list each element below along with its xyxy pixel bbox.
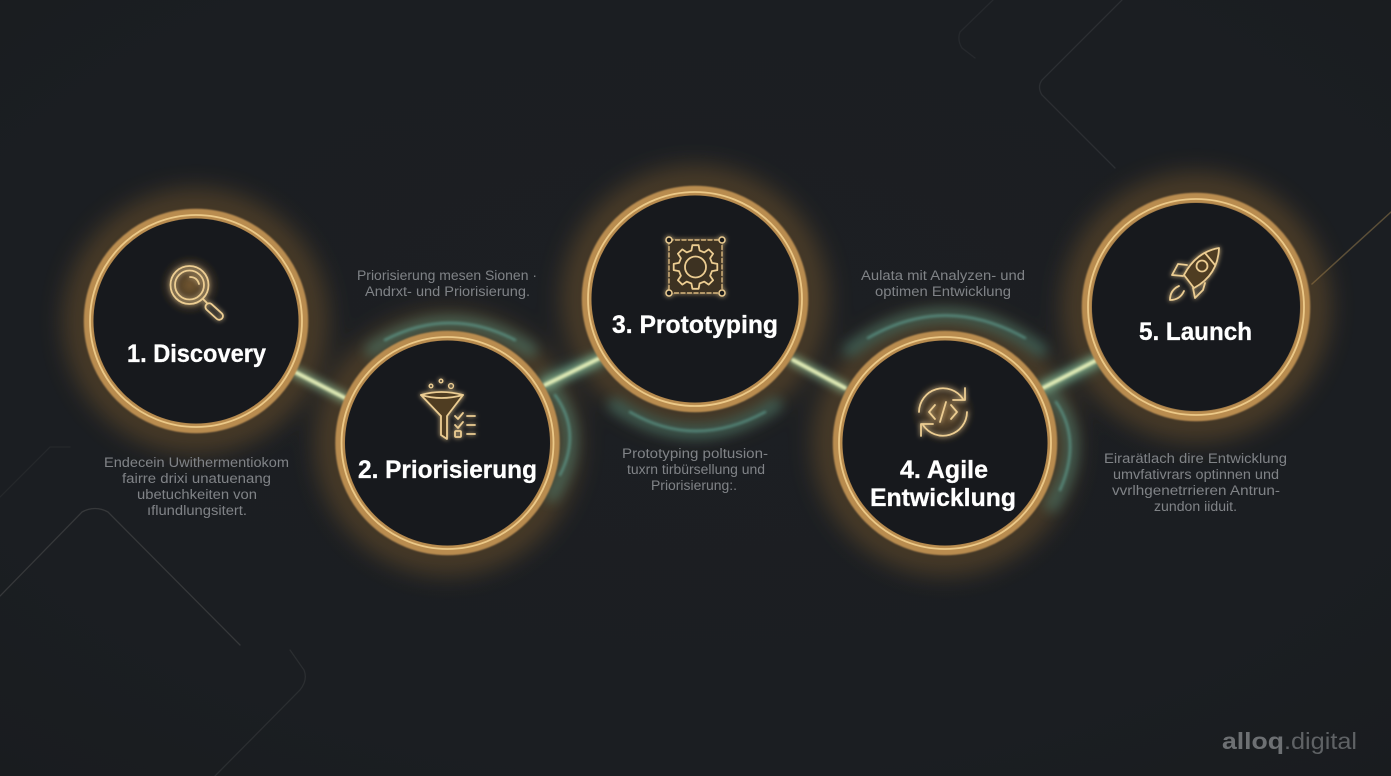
description 3: Prototyping poltusion- xyxy=(622,446,768,461)
description 5: Eirarätlach dire Entwicklung xyxy=(1104,451,1287,466)
description 1: fairre drixi unatuenang xyxy=(122,471,271,486)
step 1: Discovery xyxy=(89,214,303,428)
description 4: Aulata mit Analyzen- und xyxy=(861,268,1025,283)
logo: .digital xyxy=(1284,728,1357,754)
connector lines xyxy=(295,358,1097,398)
step 3: Prototyping xyxy=(587,191,803,407)
description 4: optimen Entwicklung xyxy=(875,284,1011,299)
description 1: ubetuchkeiten von xyxy=(137,487,257,502)
ring 5 xyxy=(1087,198,1305,416)
ring 2 xyxy=(340,336,554,550)
icon: magnifying glass xyxy=(160,255,225,321)
heading 4: 4. Agile xyxy=(900,456,988,484)
logo xyxy=(1222,728,1357,754)
ring 3 xyxy=(587,191,803,407)
description 3 xyxy=(622,446,768,493)
description 1: ıflundlungsitert. xyxy=(147,503,247,518)
heading 5: 5. Launch xyxy=(1139,318,1252,346)
description 3: tuxrn tirbürsellung und xyxy=(627,462,765,477)
step 2: Priorisierung xyxy=(340,336,554,550)
description 5: zundon iiduit. xyxy=(1154,499,1237,514)
heading 1: 1. Discovery xyxy=(127,340,266,368)
heading 4 xyxy=(870,456,1016,512)
description 5: vvrlhgenetrrieren Antrun- xyxy=(1112,483,1280,498)
icon: rocket xyxy=(1170,248,1219,300)
description 2 xyxy=(357,268,537,299)
description 2: Priorisierung mesen Sionen · xyxy=(357,268,537,283)
teal arcs behind circles xyxy=(372,315,1097,505)
description 1 xyxy=(104,455,289,518)
step 4: Agile Entwicklung xyxy=(838,336,1052,550)
heading 3: 3. Prototyping xyxy=(612,311,778,339)
description 5: umvfativrars optinnen und xyxy=(1113,467,1279,482)
logo: alloq xyxy=(1222,728,1284,754)
description 4 xyxy=(861,268,1025,299)
circle glows xyxy=(80,182,1314,559)
ring 1 xyxy=(89,214,303,428)
description 5 xyxy=(1104,451,1287,514)
ring 4 xyxy=(838,336,1052,550)
step 5: Launch xyxy=(1087,198,1305,416)
description 1: Endecein Uwithermentiokom xyxy=(104,455,289,470)
icon: gear in selection frame xyxy=(666,237,725,296)
icon: funnel with checklist xyxy=(421,379,475,439)
icon: code sync xyxy=(911,380,975,444)
description 2: Andrxt- und Priorisierung. xyxy=(365,284,530,299)
heading 4: Entwicklung xyxy=(870,484,1016,512)
heading 2: 2. Priorisierung xyxy=(358,456,537,484)
description 3: Priorisierung:. xyxy=(651,478,737,493)
